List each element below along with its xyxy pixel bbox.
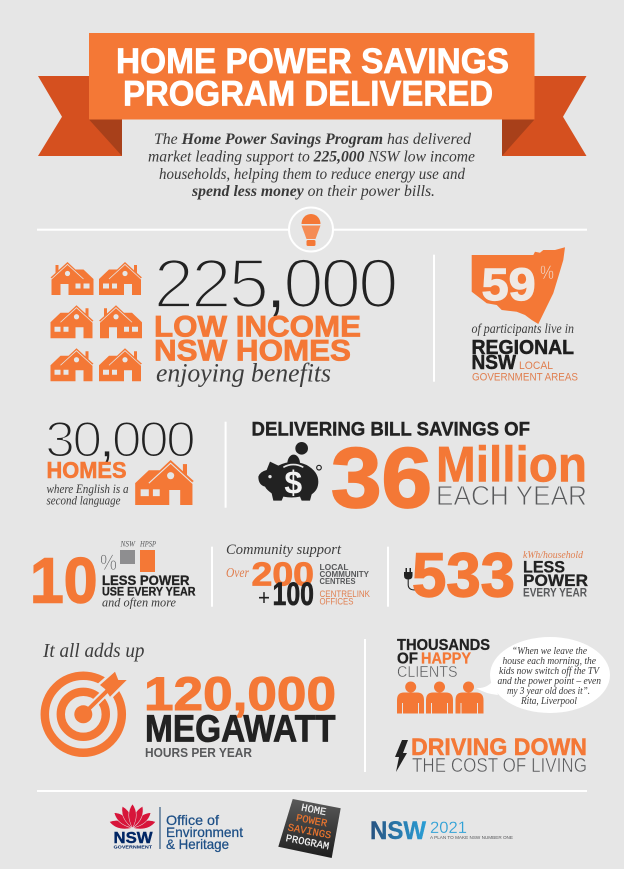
200: 200 [252,556,314,593]
second language note: second language [46,494,121,508]
heading: CLIENTS [397,664,458,681]
speech bubble quote: “When we leave the [512,646,587,657]
panel: community support [226,542,370,612]
centrelink offices: CENTRELINK [320,589,370,599]
panel: happy clients [397,637,610,714]
heading: THOUSANDS [397,637,490,654]
low income label [154,311,361,368]
panel: driving down [395,734,587,777]
panel: bill savings [252,420,587,526]
heading: It all adds up [42,640,144,662]
panel: 59% regional NSW [472,247,578,384]
number: 30,000 [45,411,194,467]
mini bar chart: HPSP [139,540,156,549]
logo: Home Power Savings Program: SAVINGS [287,822,332,843]
intro paragraph: market leading support to 225,000 NSW low income [148,148,475,166]
panel: 533 kWh [404,542,588,611]
logo: NSW 2021: A PLAN TO MAKE NSW NUMBER ONE [430,835,513,840]
office name: & Heritage [166,836,229,852]
plus 100 [258,576,314,612]
megawatt: MEGAWATT [145,709,336,751]
intro paragraph: The Home Power Savings Program has delivered [154,131,472,148]
over: Over [226,566,249,581]
heading: DELIVERING BILL SAVINGS OF [252,420,530,441]
logo: NSW 2021: NSW [370,817,426,845]
logo: NSW 2021 [370,817,513,845]
plus 100: 100 [272,576,314,612]
less power text [102,573,196,598]
local community centres [320,562,369,586]
logo: NSW Government Office of Environment and Heritage [108,804,243,852]
36: 36 [331,431,432,526]
title ribbon banner [38,33,586,156]
icon: six houses [50,262,142,381]
low income label: LOW INCOME [154,311,361,344]
icon: waratah [108,804,157,832]
office name: Office of [166,812,219,828]
icon: NSW map [472,247,565,324]
and often more: and often more [102,595,176,610]
mini bar chart [120,540,156,572]
logo: Home Power Savings Program: HOME [300,803,327,819]
speech bubble quote [476,637,610,713]
low income label: NSW HOMES [154,335,351,368]
NSW wordmark: GOVERNMENT [114,844,152,850]
heading: HAPPY [421,650,471,668]
speech bubble quote: Rita, Liverpool [520,696,577,707]
intro paragraph: households, helping them to reduce energy use and [159,166,466,183]
centrelink offices: OFFICES [320,596,354,606]
panel: it all adds up [42,640,336,760]
local community centres: LOCAL [320,562,348,572]
enjoying benefits: enjoying benefits [156,359,331,388]
speech bubble quote: and the power point – even [498,676,601,687]
local government areas: LOCAL [519,360,553,372]
intro paragraph: spend less money on their power bills. [191,183,435,200]
local community centres: COMMUNITY [320,569,369,579]
533: 533 [412,542,515,611]
local government areas [472,360,578,384]
10: 10 [30,545,98,617]
59 percent [482,259,554,310]
less power every year: EVERY YEAR [523,586,587,600]
panel: 225,000 homes [50,245,397,388]
icon: house [135,460,194,505]
panel: 30,000 homes [45,411,194,508]
each year: EACH YEAR [436,480,587,511]
hours per year: HOURS PER YEAR [145,745,253,760]
icon: target with arrow [45,672,127,753]
homes label: HOMES [46,457,126,483]
speech bubble quote: my 3 year old does it”. [507,686,590,697]
local community centres: CENTRES [320,576,356,586]
less power text: LESS POWER [102,573,190,588]
icon: light bulb [289,208,333,252]
million: Million [436,437,587,493]
speech bubble quote: kids now switch off the TV [499,666,600,677]
59 percent: 59 [482,259,536,310]
logo: Home Power Savings Program: PROGRAM [284,833,330,853]
kWh per household: kWh/household [523,550,584,561]
heading [397,637,490,681]
office name: Environment [166,824,243,840]
title: HOME POWER SAVINGS [116,42,509,81]
driving down: DRIVING DOWN [411,734,587,761]
logo: Home Power Savings Program [278,799,341,858]
less power every year: POWER [523,571,588,590]
heading: OF [397,650,418,668]
cost of living: THE COST OF LIVING [412,755,587,777]
speech bubble quote: house each morning, the [502,656,596,667]
heading: Community support [226,542,342,558]
title [116,42,509,114]
icon: lightning bolt [395,740,408,772]
logo: Home Power Savings Program: POWER [295,813,329,831]
icon: plug [404,568,415,590]
icon: three people [397,682,484,714]
second language note [46,482,128,508]
centrelink offices [320,589,370,606]
second language note: where English is a [46,482,128,496]
title: PROGRAM DELIVERED [123,74,493,114]
less power text: USE EVERY YEAR [102,584,196,598]
120,000: 120,000 [144,667,336,720]
less power every year [523,558,588,600]
icon: piggy bank: $ [284,464,302,500]
big number: 225,000 [154,245,397,323]
panel: 10% less power [30,540,196,617]
intro paragraph [148,131,475,200]
percent: % [100,550,117,575]
local government areas: GOVERNMENT AREAS [472,372,578,384]
59 percent: % [540,263,554,284]
icon: piggy bank [258,442,321,501]
less power every year: LESS [523,558,565,577]
plus 100: + [258,585,270,610]
regional NSW [472,337,574,374]
logo: NSW 2021: 2021 [430,818,467,837]
mini bar chart: NSW [120,540,136,549]
of participants live in: of participants live in [472,322,574,337]
NSW wordmark: NSW [114,830,153,847]
office name [166,812,243,852]
regional NSW: REGIONAL [472,337,574,359]
regional NSW: NSW [472,352,516,374]
